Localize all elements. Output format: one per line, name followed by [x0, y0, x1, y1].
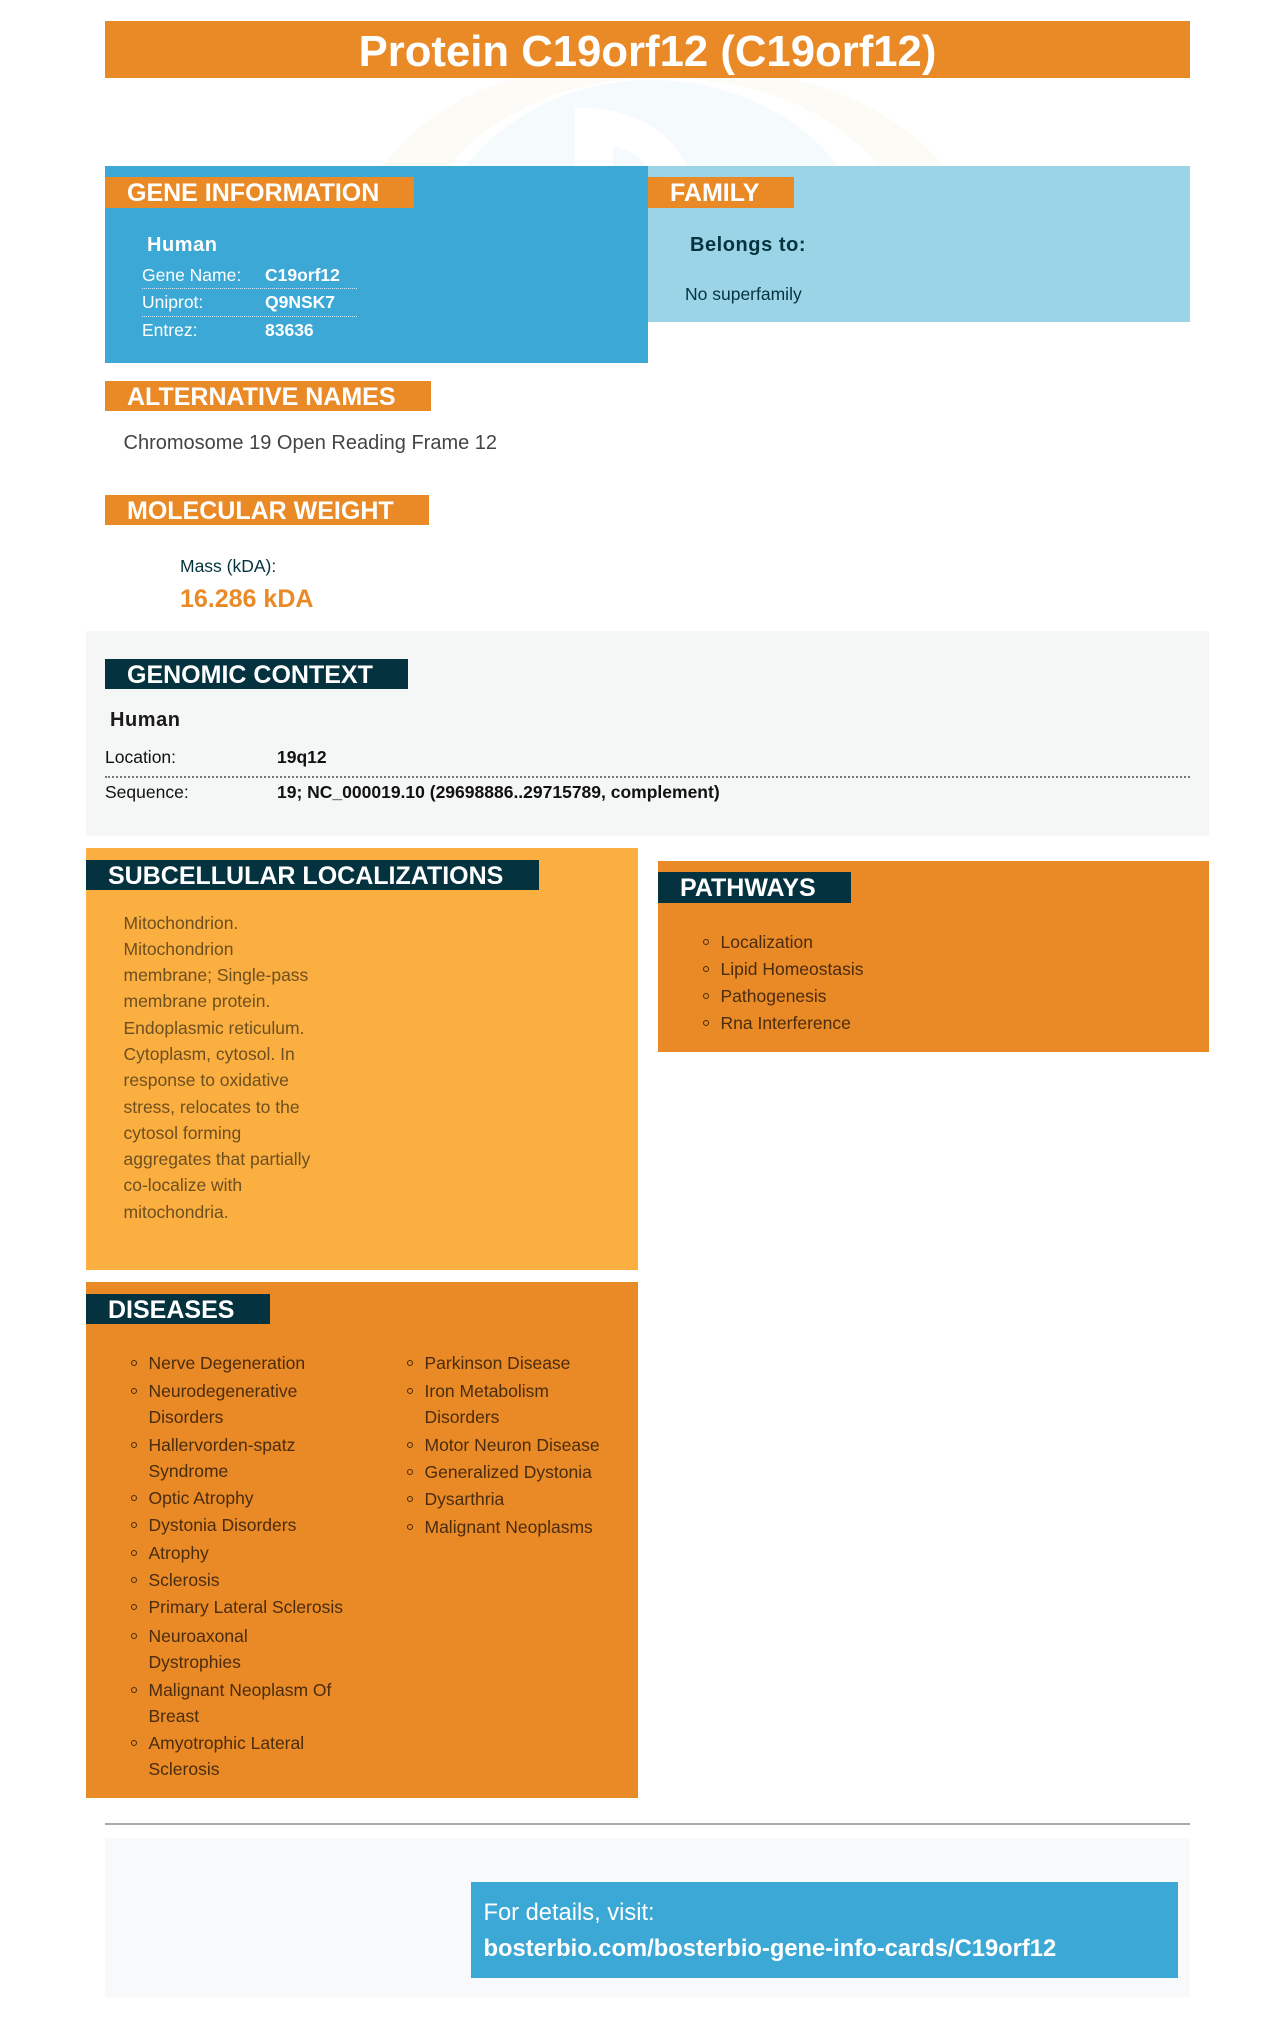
mass label: Mass (kDA):: [180, 556, 276, 576]
heading: family: FAMILY: [670, 179, 759, 207]
panel: molecular weight: [105, 495, 429, 613]
disease list: left column: Dystonia Disorders: [148, 1515, 296, 1535]
disease list: left column: Hallervorden-spatz: [148, 1435, 295, 1455]
heading: pathways: [658, 872, 851, 903]
pathway list: Pathogenesis: [720, 986, 827, 1006]
pathway list: [703, 932, 863, 1033]
watermark logo: [384, 78, 944, 166]
localization text: [124, 912, 310, 1222]
disease list: right column: Malignant Neoplasms: [424, 1517, 593, 1537]
sequence value: 19; NC_000019.10 (29698886..29715789, complement): [277, 782, 720, 802]
localization text: Cytoplasm, cytosol. In: [124, 1044, 295, 1064]
disease list: right column: Disorders: [424, 1407, 499, 1427]
family value: No superfamily: [685, 284, 802, 304]
disease list: left column: Disorders: [148, 1407, 223, 1427]
callout: details link: [471, 1882, 1178, 1978]
heading: family: [648, 177, 794, 208]
title: [105, 21, 1190, 78]
localization text: mitochondria.: [124, 1202, 229, 1222]
disease list: right column: Iron Metabolism: [424, 1381, 549, 1401]
disease list: left column: Sclerosis: [148, 1759, 220, 1779]
localization text: stress, relocates to the: [124, 1097, 300, 1117]
belongs to label: Belongs to:: [690, 234, 806, 256]
localization text: membrane protein.: [124, 991, 270, 1011]
localization text: co-localize with: [124, 1175, 242, 1195]
heading: gene information: GENE INFORMATION: [127, 179, 379, 207]
heading: genomic context: GENOMIC CONTEXT: [127, 661, 373, 689]
disease list: left column: Nerve Degeneration: [148, 1353, 305, 1373]
alternative names text: Chromosome 19 Open Reading Frame 12: [124, 432, 497, 454]
localization text: cytosol forming: [124, 1123, 241, 1143]
localization text: aggregates that partially: [124, 1149, 310, 1169]
entrez row: Entrez:: [142, 320, 197, 340]
panel: subcellular localizations: [86, 848, 638, 1270]
heading: pathways: PATHWAYS: [680, 874, 816, 902]
disease list: left column: [131, 1353, 343, 1779]
localization text: membrane; Single-pass: [124, 965, 308, 985]
panel: pathways: [658, 861, 1209, 1052]
disease list: right column: Dysarthria: [424, 1489, 504, 1509]
panel: diseases: [86, 1282, 638, 1798]
disease list: left column: Syndrome: [148, 1461, 228, 1481]
uniprot value: Q9NSK7: [265, 292, 335, 312]
panel: footer: [105, 1838, 1190, 1997]
localization text: Mitochondrion: [124, 939, 233, 959]
heading: alternative names: ALTERNATIVE NAMES: [127, 383, 396, 411]
pathway list: Rna Interference: [720, 1013, 851, 1033]
disease list: right column: Motor Neuron Disease: [424, 1435, 600, 1455]
heading: subcellular localizations: SUBCELLULAR LOCALIZATIONS: [108, 862, 503, 890]
pathway list: Localization: [720, 932, 813, 952]
localization text: Mitochondrion.: [124, 912, 238, 932]
disease list: left column: Breast: [148, 1706, 199, 1726]
gene name value: C19orf12: [265, 265, 340, 285]
disease list: left column: Dystrophies: [148, 1652, 241, 1672]
pathway list: Lipid Homeostasis: [720, 959, 863, 979]
heading: molecular weight: MOLECULAR WEIGHT: [127, 497, 394, 525]
disease list: left column: Atrophy: [148, 1543, 209, 1563]
mass value: 16.286 kDA: [180, 585, 313, 613]
url: bosterbio.com/bosterbio-gene-info-cards/C19orf12: [484, 1935, 1056, 1962]
disease list: left column: Amyotrophic Lateral: [148, 1733, 304, 1753]
panel: gene information: [105, 166, 648, 363]
disease list: right column: Parkinson Disease: [424, 1353, 570, 1373]
disease list: right column: Generalized Dystonia: [424, 1462, 592, 1482]
disease list: left column: Sclerosis: [148, 1570, 220, 1590]
panel: family: [648, 166, 1190, 322]
disease list: left column: Malignant Neoplasm Of: [148, 1680, 331, 1700]
organism label: Human: [147, 234, 218, 256]
localization text: Endoplasmic reticulum.: [124, 1018, 304, 1038]
entrez value: 83636: [265, 320, 314, 340]
disease list: left column: Primary Lateral Sclerosis: [148, 1597, 343, 1617]
disease list: left column: Neuroaxonal: [148, 1626, 248, 1646]
visit label: For details, visit:: [484, 1900, 655, 1926]
localization text: response to oxidative: [124, 1070, 289, 1090]
gene name row: Gene Name:: [142, 265, 241, 285]
panel: genomic context: [86, 631, 1209, 836]
location value: 19q12: [277, 747, 327, 767]
uniprot row: Uniprot:: [142, 292, 203, 312]
disease list: left column: Optic Atrophy: [148, 1488, 254, 1508]
organism label: Human: [110, 709, 181, 731]
title: Protein C19orf12 (C19orf12): [359, 27, 936, 76]
disease list: right column: [407, 1353, 600, 1537]
heading: diseases: [86, 1294, 270, 1324]
heading: diseases: DISEASES: [108, 1296, 234, 1324]
location label: Location:: [105, 747, 176, 767]
sequence label: Sequence:: [105, 782, 189, 802]
panel: alternative names: [105, 381, 497, 454]
disease list: left column: Neurodegenerative: [148, 1381, 297, 1401]
